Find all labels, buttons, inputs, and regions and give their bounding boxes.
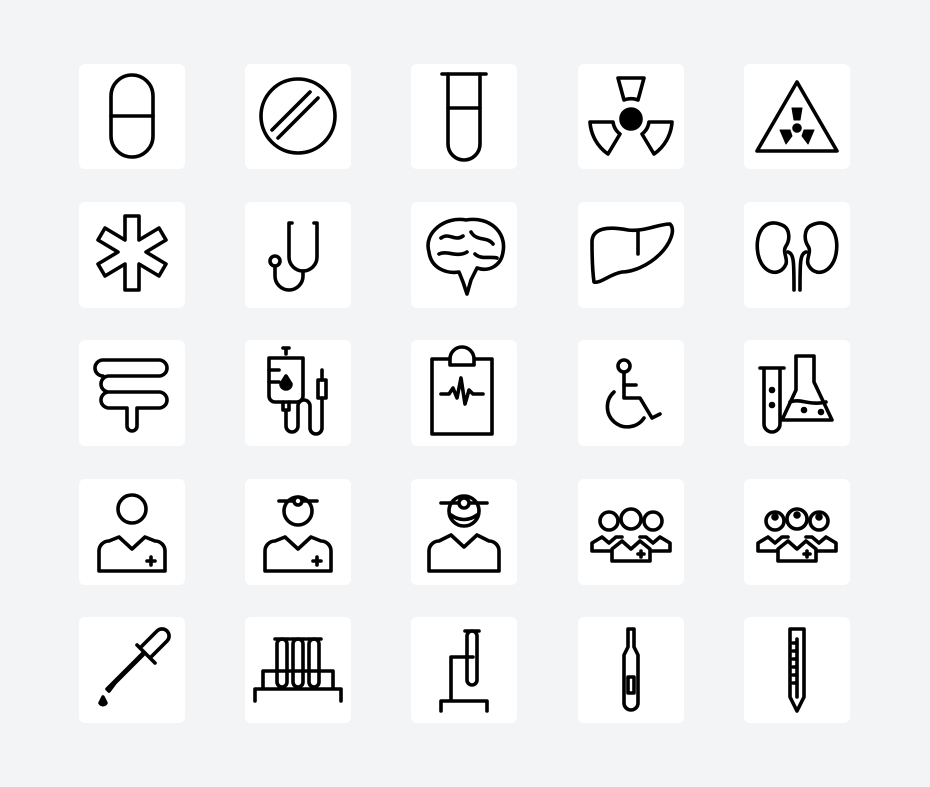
tile: doctor with head mirror: [245, 479, 351, 585]
tile: doctor: [79, 479, 185, 585]
tile: tablet: [245, 64, 351, 169]
tile: brain: [411, 202, 517, 308]
tile: kidneys: [744, 202, 850, 308]
tile: clipboard: [411, 340, 517, 446]
tile: intestine: [79, 340, 185, 446]
tile: test tube rack: [245, 617, 351, 723]
tile: star of life: [79, 202, 185, 308]
tile: lab flasks: [744, 340, 850, 446]
tile: radiation: [578, 64, 684, 169]
tile: medical team with mirrors: [744, 479, 850, 585]
tile: radiation warning triangle: [744, 64, 850, 169]
tile: wheelchair: [578, 340, 684, 446]
tile: dropper: [79, 617, 185, 723]
tile: pill capsule: [79, 64, 185, 169]
tile: medical pen: [578, 617, 684, 723]
tile: stethoscope: [245, 202, 351, 308]
tile: stand with tube: [411, 617, 517, 723]
tile: doctor with glasses: [411, 479, 517, 585]
tile: medical team: [578, 479, 684, 585]
tile: IV drip: [245, 340, 351, 446]
tile: test tube: [411, 64, 517, 169]
tile: liver: [578, 202, 684, 308]
tile: thermometer: [744, 617, 850, 723]
